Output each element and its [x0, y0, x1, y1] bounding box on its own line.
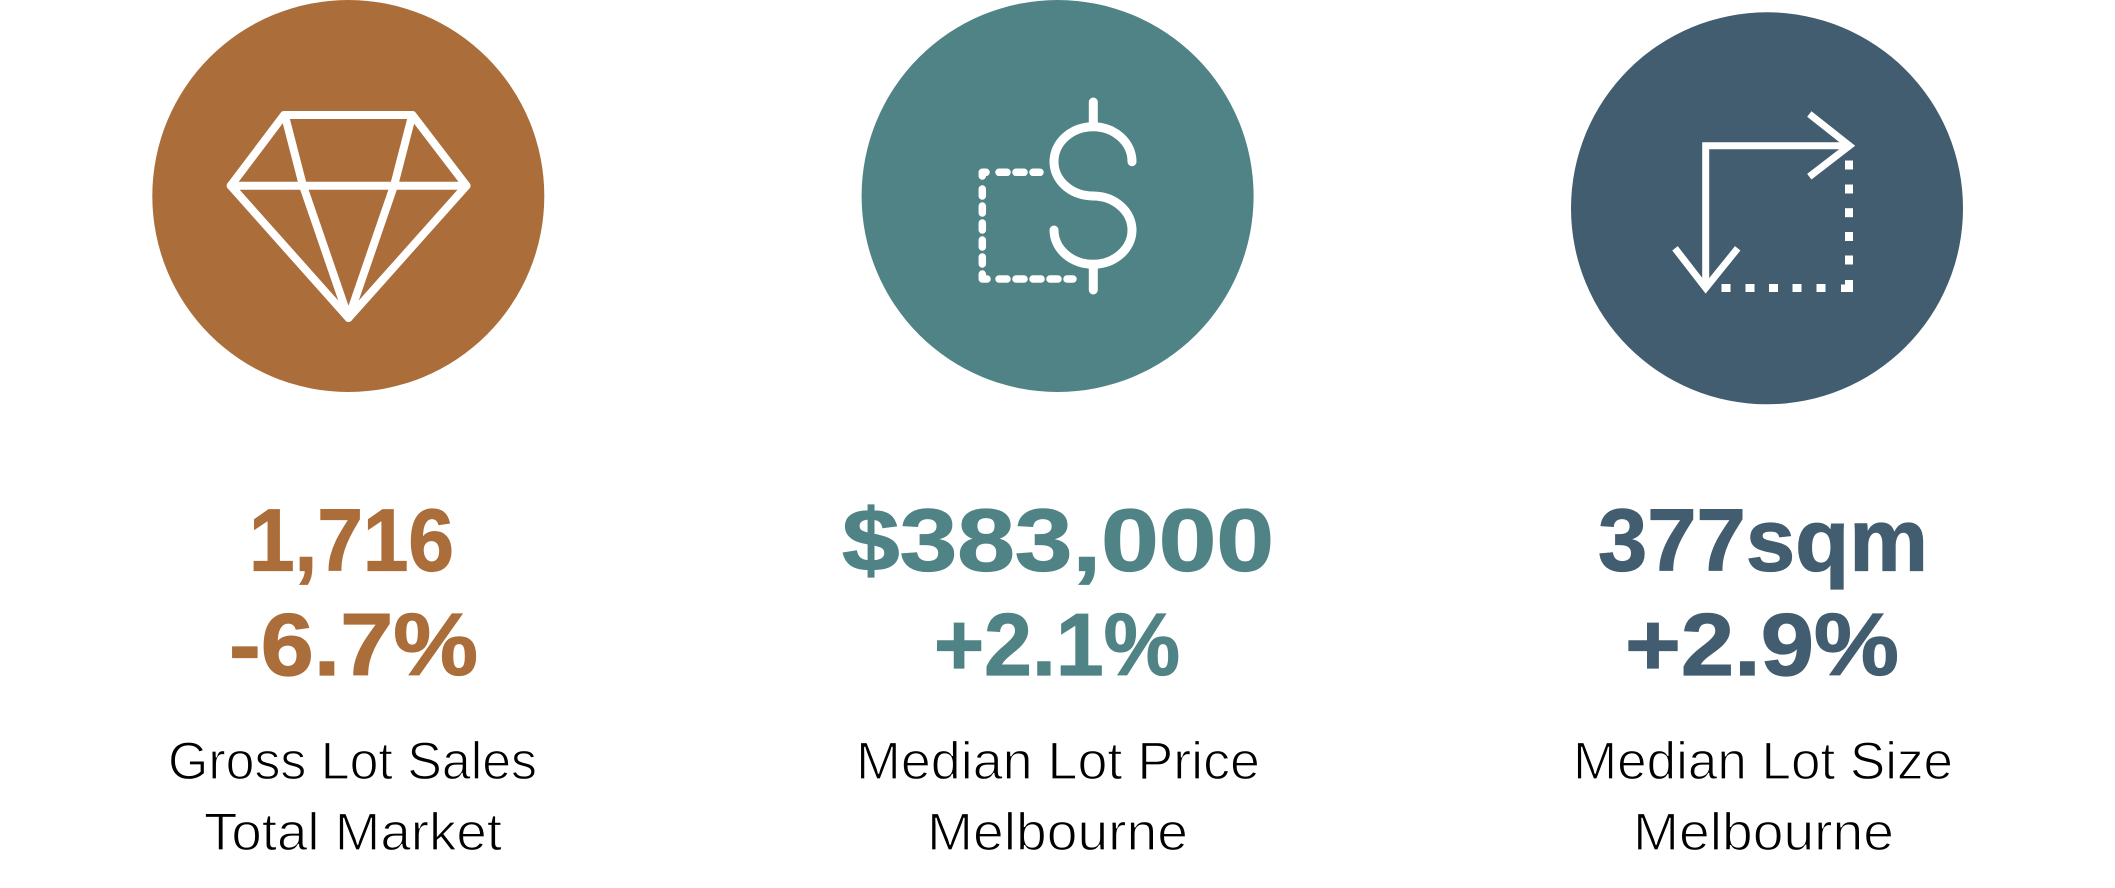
label: melbourne: Melbourne [927, 803, 1188, 862]
value: gross lot sales: 1,716 [249, 491, 454, 590]
label: melbourne: Melbourne [1633, 803, 1894, 862]
icon: diamond in brown circle [152, 0, 544, 392]
panel: median lot price [842, 0, 1274, 862]
change: gross lot sales: -6.7% [229, 595, 478, 694]
label: gross lot sales: Gross Lot Sales [168, 732, 537, 791]
icon: dollar in teal circle [862, 0, 1254, 392]
panel: gross lot sales [152, 0, 544, 862]
panel: median lot size [1571, 12, 1963, 862]
label: median lot price: Median Lot Price [856, 732, 1260, 791]
label: median lot size: Median Lot Size [1573, 732, 1953, 791]
change: median lot price: +2.1% [934, 595, 1180, 694]
label: total market: Total Market [204, 803, 502, 862]
value: median lot size: 377sqm [1598, 491, 1928, 590]
icon: resize arrows in navy circle [1571, 12, 1963, 404]
change: median lot size: +2.9% [1625, 595, 1899, 694]
value: median lot price: $383,000 [842, 491, 1274, 590]
